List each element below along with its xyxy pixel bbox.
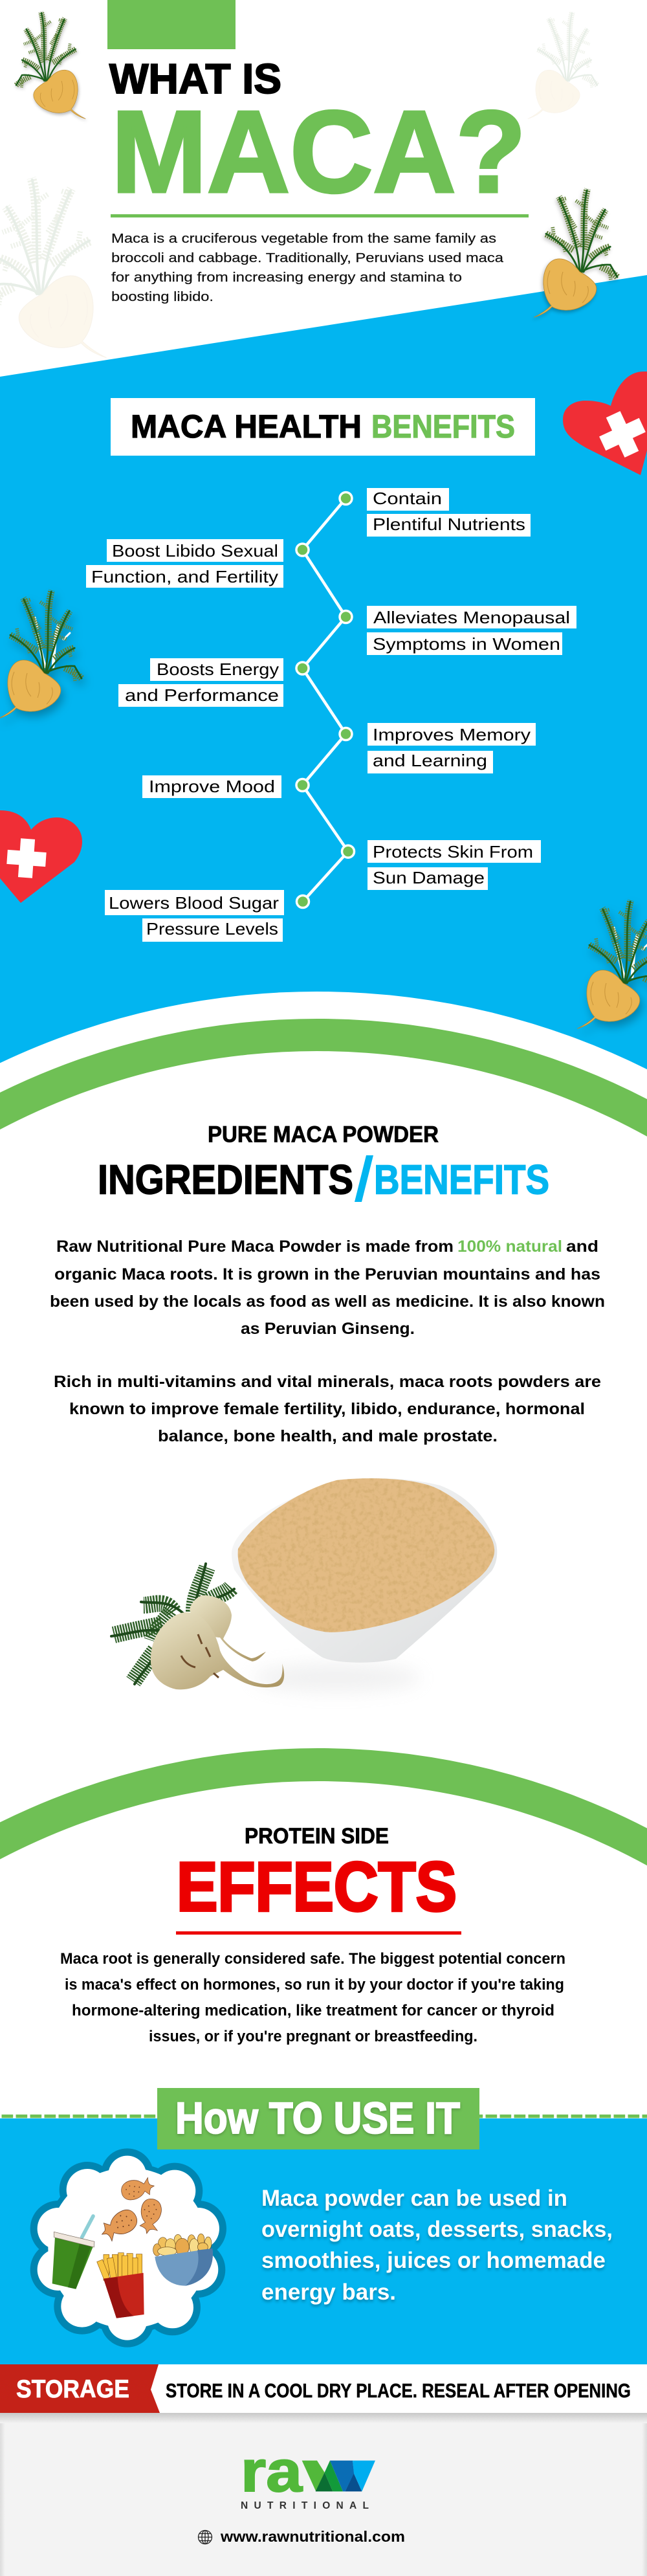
- label: energy and performance: and Performance: [125, 685, 279, 705]
- label: protects skin: [367, 840, 541, 890]
- divider: white arch: [0, 992, 647, 1165]
- label: blood sugar: Lowers Blood Sugar: [109, 893, 279, 913]
- heading: ingredients benefits: BENEFITS: [374, 1156, 549, 1203]
- label: menopausal symptoms: Symptoms in Women: [373, 634, 560, 654]
- divider: second green arch: [0, 1748, 647, 1877]
- title: maca: MACA?: [111, 87, 526, 217]
- title: what is: WHAT IS: [109, 55, 281, 102]
- white strip: [0, 2364, 647, 2413]
- label: energy and performance: Boosts Energy: [157, 660, 279, 679]
- how to use text: overnight oats, desserts, snacks,: [261, 2217, 613, 2242]
- label: blood sugar: Pressure Levels: [146, 919, 278, 938]
- how to use text: smoothies, juices or homemade: [261, 2248, 606, 2273]
- logo: raw: ra: [241, 2439, 303, 2504]
- panel: blue benefits background: [0, 275, 647, 1152]
- icon: maca root right: [577, 900, 647, 1028]
- bowl shadow: [252, 1663, 421, 1692]
- paragraph one: as Peruvian Ginseng.: [241, 1320, 415, 1338]
- large root: [151, 1612, 284, 1689]
- heading banner: MACA HEALTH: [131, 408, 362, 445]
- icon: fries: [97, 2253, 144, 2318]
- panel: footer: [0, 2413, 647, 2576]
- paragraph two: known to improve female fertility, libido, endurance, hormonal: [69, 1400, 585, 1418]
- label: improve mood: Improve Mood: [149, 777, 275, 796]
- paragraph two: [54, 1373, 601, 1445]
- effects text: is maca's effect on hormones, so run it by your doctor if you're taking: [65, 1976, 564, 1993]
- heading: pure maca powder: PURE MACA POWDER: [208, 1121, 439, 1147]
- divider: green arch outer: [0, 1019, 647, 1165]
- divider: green arch inner cut: [0, 1051, 647, 1197]
- cloud outline: [30, 2148, 226, 2348]
- intro text: for anything from increasing energy and stamina to: [111, 270, 462, 285]
- label: memory and learning: Improves Memory: [373, 725, 531, 744]
- effects text: issues, or if you're pregnant or breastfeeding.: [149, 2028, 477, 2045]
- label: memory and learning: and Learning: [373, 751, 487, 770]
- how to use text: [261, 2186, 613, 2305]
- effects text: Maca root is generally considered safe. The biggest potential concern: [60, 1950, 565, 1968]
- heading: ingredients benefits: [98, 1155, 549, 1203]
- paragraph one: been used by the locals as food as well as medicine. It is also known: [50, 1293, 605, 1311]
- paragraph two: Rich in multi-vitamins and vital minerals, maca roots powders are: [54, 1373, 601, 1391]
- intro text: Maca is a cruciferous vegetable from the same family as: [111, 231, 496, 246]
- panel: side effects: [60, 1824, 565, 2045]
- intro text: broccoli and cabbage. Traditionally, Peruvians used maca: [111, 250, 504, 265]
- effects underline: [176, 1931, 461, 1935]
- panel: storage bar: [0, 2364, 647, 2413]
- icon: drink cup: [52, 2216, 94, 2289]
- cloud fill: [38, 2156, 219, 2340]
- how to use text: energy bars.: [261, 2280, 396, 2305]
- website: www.rawnutritional.com: [220, 2528, 405, 2545]
- footer background: [0, 2413, 647, 2576]
- panel: ingredients and benefits: [50, 1121, 605, 1692]
- title: how to use it: How TO USE IT: [175, 2093, 460, 2143]
- blue background: [0, 2118, 647, 2364]
- paragraph one: Raw Nutritional Pure Maca Powder is made from: [56, 1238, 454, 1256]
- paragraph two: balance, bone health, and male prostate.: [158, 1427, 498, 1445]
- panel: how to use it: [0, 2088, 647, 2364]
- paragraph one: organic Maca roots. It is grown in the Peruvian mountains and has: [54, 1265, 600, 1283]
- label: energy and performance: [118, 658, 283, 707]
- label: menopausal symptoms: Alleviates Menopausal: [373, 608, 570, 627]
- small root: [190, 1595, 266, 1661]
- image: maca powder bowl and roots: [111, 1478, 497, 1692]
- label: menopausal symptoms: [367, 606, 576, 655]
- label: plentiful nutrients: [367, 488, 531, 537]
- heading: effects: EFFECTS: [177, 1847, 457, 1926]
- root markings: [181, 1634, 219, 1678]
- timeline connector: [303, 498, 348, 902]
- icon: fish crackers: [97, 2176, 163, 2244]
- icon: heart top right: [563, 372, 647, 475]
- storage label: STORAGE: [16, 2375, 129, 2403]
- icon: heart lower left: [0, 810, 82, 903]
- divider: second arch inner cut: [0, 1781, 647, 1942]
- label: improve mood: [142, 775, 281, 798]
- icon: maca root top left: [16, 12, 85, 119]
- food cloud: [30, 2148, 226, 2348]
- label: protects skin: Protects Skin From: [373, 842, 533, 861]
- logo: raw: [241, 2439, 375, 2504]
- how to use text: Maca powder can be used in: [261, 2186, 567, 2211]
- label: memory and learning: [367, 723, 536, 773]
- timeline nodes: [296, 492, 355, 907]
- maca powder: [238, 1478, 494, 1632]
- paragraph one: [50, 1238, 605, 1338]
- paragraph one: 100% natural: [457, 1238, 562, 1256]
- intro text: boosting libido.: [111, 289, 214, 304]
- label: boost libido: Function, and Fertility: [91, 567, 278, 586]
- green top tab: [107, 0, 236, 49]
- panel: health benefits: [0, 372, 647, 1028]
- icon: globe: [198, 2531, 212, 2544]
- heading banner: BENEFITS: [371, 408, 515, 445]
- icon: maca root left: [0, 590, 82, 718]
- panel: what is maca: [0, 0, 597, 358]
- icon: maca root right of intro: [534, 189, 617, 317]
- label: boost libido: Boost Libido Sexual: [112, 541, 278, 561]
- effects text: hormone-altering medication, like treatment for cancer or thyroid: [72, 2002, 554, 2019]
- heading: protein side: PROTEIN SIDE: [245, 1824, 389, 1849]
- red storage tag: [0, 2364, 160, 2413]
- title underline: [111, 214, 529, 217]
- label: boost libido: [86, 539, 283, 588]
- white bowl: [232, 1478, 497, 1663]
- label: protects skin: Sun Damage: [373, 868, 485, 887]
- heading: ingredients benefits: INGREDIENTS: [98, 1156, 353, 1203]
- label: blood sugar: [105, 890, 284, 942]
- dashed green edge: [1, 2115, 647, 2118]
- heading banner: [111, 398, 535, 456]
- logo: nutritional: NUTRITIONAL: [241, 2500, 369, 2511]
- icon: chip bowl: [153, 2234, 213, 2286]
- intro text: [111, 231, 504, 304]
- icon: faded maca top right: [528, 12, 597, 119]
- photo leaves: [111, 1564, 234, 1684]
- effects text: [60, 1950, 565, 2045]
- green title tab: [157, 2088, 479, 2149]
- label: plentiful nutrients: Plentiful Nutrients: [373, 515, 525, 534]
- label: plentiful nutrients: Contain: [373, 489, 442, 508]
- icon: faded maca left: [0, 178, 107, 358]
- paragraph one: and: [566, 1238, 598, 1256]
